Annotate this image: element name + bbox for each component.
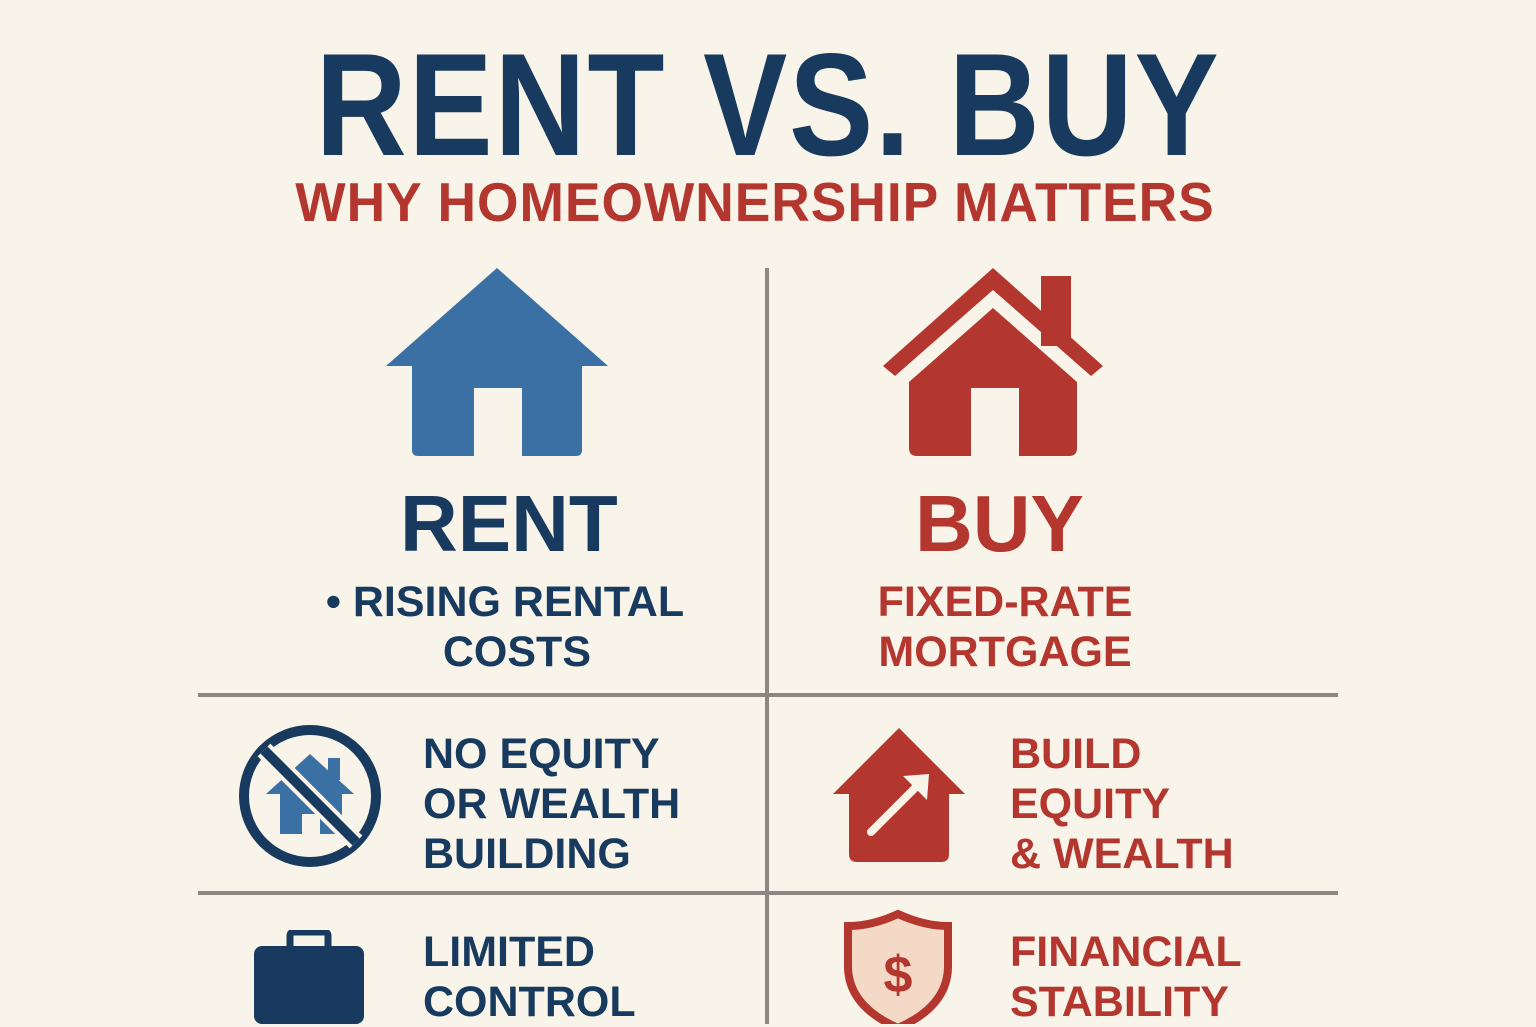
text: build equity (1010, 730, 1234, 878)
text: buy cost: FIXED-RATE (878, 578, 1132, 626)
text: no equity (423, 730, 680, 878)
text: buy cost (878, 578, 1132, 676)
text: limited control (423, 928, 636, 1026)
text: rent cost: COSTS (443, 628, 591, 676)
icon: shield (844, 910, 952, 1024)
text: no equity: BUILDING (423, 830, 631, 878)
icon: no equity (239, 725, 381, 867)
icon: shield: $ (884, 946, 913, 1004)
vertical divider (765, 268, 769, 1024)
text: limited control: LIMITED (423, 928, 595, 976)
heading: BUY: BUY (915, 479, 1084, 568)
text: rent cost (326, 578, 684, 676)
text: rent cost: • RISING RENTAL (326, 578, 684, 626)
text: financial stability: FINANCIAL (1010, 928, 1242, 976)
subtitle: WHY HOMEOWNERSHIP MATTERS (295, 171, 1215, 233)
icon: blue house (386, 268, 608, 456)
heading: RENT: RENT (400, 479, 618, 568)
text: build equity: EQUITY (1010, 780, 1170, 828)
text: no equity: NO EQUITY (423, 730, 660, 778)
text: financial stability (1010, 928, 1242, 1026)
text: build equity: BUILD (1010, 730, 1141, 778)
text: no equity: OR WEALTH (423, 780, 680, 828)
text: build equity: & WEALTH (1010, 830, 1234, 878)
icon: red house (883, 268, 1103, 456)
icon: briefcase (254, 930, 364, 1024)
horizontal divider 2 (198, 891, 1338, 895)
horizontal divider 1 (198, 693, 1338, 697)
text: financial stability: STABILITY (1010, 978, 1229, 1026)
title: RENT VS. BUY (316, 23, 1220, 186)
text: limited control: CONTROL (423, 978, 636, 1026)
icon: build equity (833, 728, 965, 862)
text: buy cost: MORTGAGE (878, 628, 1132, 676)
